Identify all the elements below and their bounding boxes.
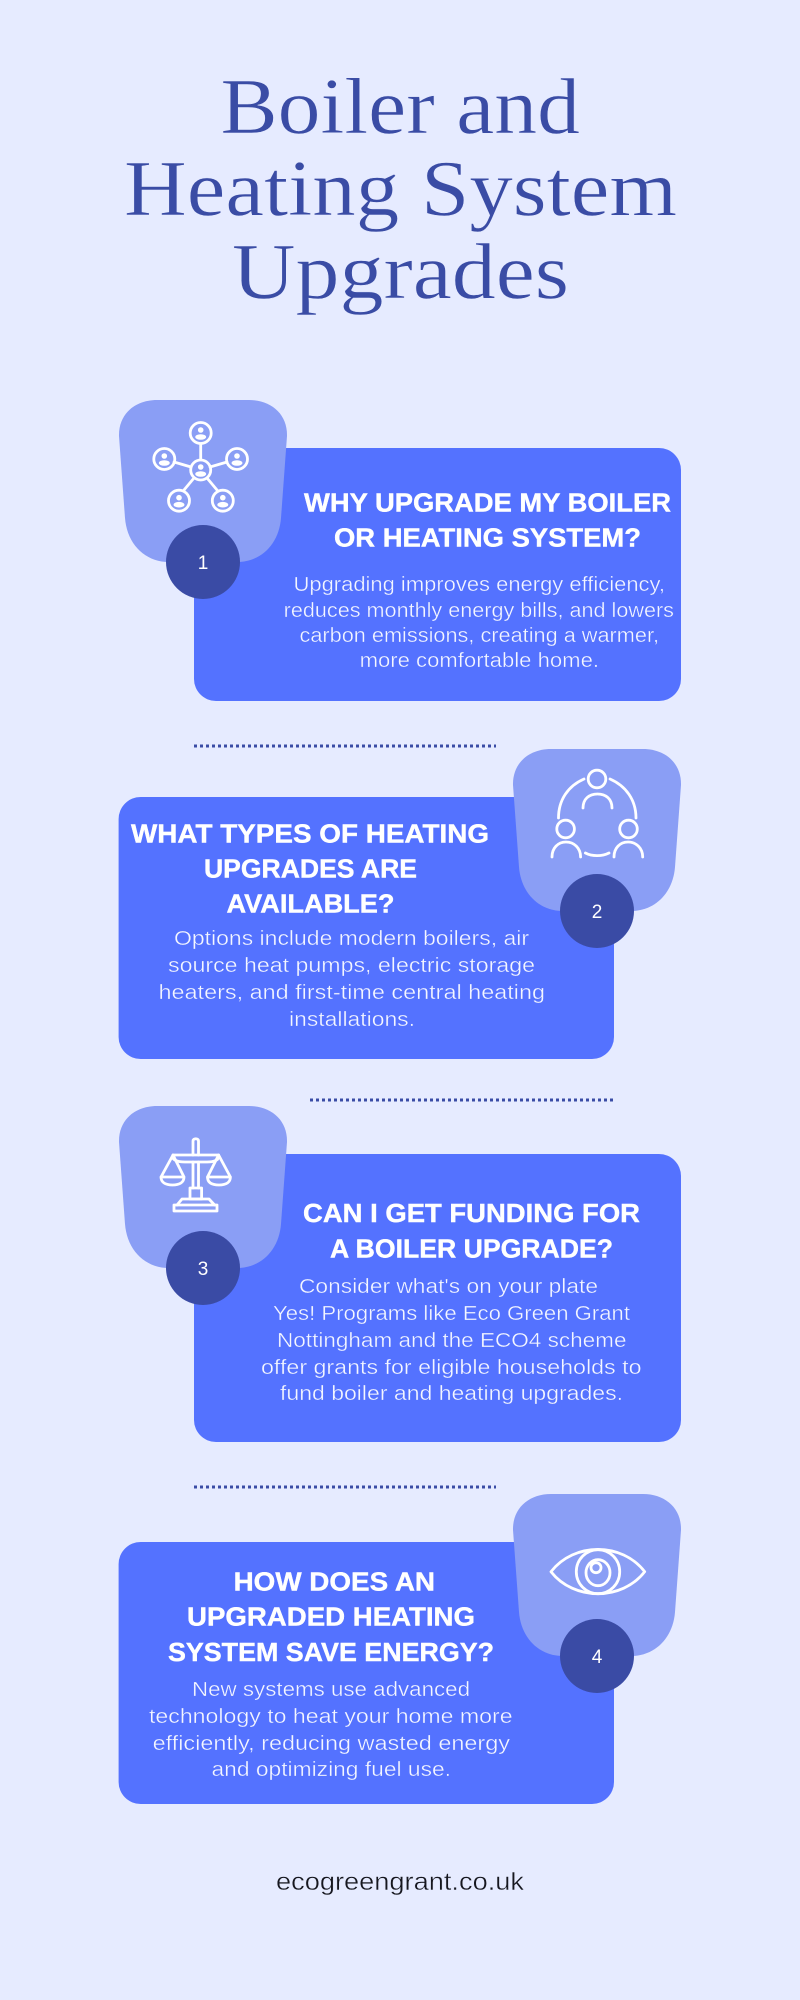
footer website: ecogreengrant.co.uk bbox=[276, 1868, 525, 1896]
panel: why upgrade bbox=[119, 400, 681, 701]
body text 3: Nottingham and the ECO4 scheme bbox=[277, 1330, 626, 1352]
body text 4: technology to heat your home more bbox=[149, 1706, 513, 1728]
body text 3: Consider what's on your plate bbox=[299, 1276, 598, 1298]
title bbox=[124, 64, 677, 316]
body text 1: Upgrading improves energy efficiency, bbox=[294, 574, 665, 596]
card background 3 bbox=[194, 1154, 681, 1442]
card background 1 bbox=[194, 448, 681, 701]
body text 3: fund boiler and heating upgrades. bbox=[280, 1383, 623, 1405]
icon: circle of people bbox=[552, 770, 643, 857]
title: Boiler and bbox=[220, 64, 580, 151]
heading 4: HOW DOES AN bbox=[234, 1569, 435, 1597]
icon: balance scales bbox=[161, 1139, 230, 1211]
number badge 3: 3 bbox=[198, 1259, 208, 1280]
body text 3: Yes! Programs like Eco Green Grant bbox=[273, 1303, 630, 1325]
heading 3 bbox=[303, 1200, 640, 1264]
heading 3: A BOILER UPGRADE? bbox=[330, 1236, 613, 1264]
body text 4: New systems use advanced bbox=[192, 1679, 470, 1701]
body text 2: installations. bbox=[289, 1009, 415, 1031]
icon badge 2 bbox=[513, 749, 681, 911]
number badge 4: 4 bbox=[592, 1647, 603, 1668]
heading 2: AVAILABLE? bbox=[226, 891, 394, 919]
icon: eye bbox=[551, 1549, 645, 1594]
card background 4 bbox=[119, 1542, 614, 1804]
heading 1 bbox=[304, 490, 671, 552]
card background 2 bbox=[119, 797, 614, 1059]
number badge 4 bbox=[560, 1619, 634, 1693]
icon badge 4 bbox=[513, 1494, 681, 1656]
icon badge 3 bbox=[119, 1106, 287, 1268]
title: Upgrades bbox=[232, 229, 569, 316]
number badge 2 bbox=[560, 874, 634, 948]
title: Heating System bbox=[124, 146, 677, 233]
heading 1: OR HEATING SYSTEM? bbox=[334, 524, 641, 552]
body text 1: more comfortable home. bbox=[360, 650, 599, 672]
heading 1: WHY UPGRADE MY BOILER bbox=[304, 490, 671, 518]
body text 2: heaters, and first-time central heating bbox=[158, 982, 545, 1004]
body text 1: carbon emissions, creating a warmer, bbox=[300, 625, 659, 647]
icon badge 1 bbox=[119, 400, 287, 562]
body text 2 bbox=[158, 928, 545, 1031]
body text 3 bbox=[261, 1276, 642, 1405]
heading 2: WHAT TYPES OF HEATING bbox=[131, 821, 489, 849]
number badge 1: 1 bbox=[198, 553, 208, 574]
body text 1: reduces monthly energy bills, and lowers bbox=[284, 600, 674, 622]
heading 2: UPGRADES ARE bbox=[204, 855, 417, 883]
number badge 3 bbox=[166, 1231, 240, 1305]
body text 4: and optimizing fuel use. bbox=[212, 1759, 451, 1781]
icon: people network bbox=[154, 422, 248, 511]
heading 3: CAN I GET FUNDING FOR bbox=[303, 1200, 640, 1228]
heading 4 bbox=[168, 1569, 494, 1667]
number badge 2: 2 bbox=[592, 902, 602, 923]
body text 2: source heat pumps, electric storage bbox=[168, 955, 535, 977]
heading 4: UPGRADED HEATING bbox=[187, 1604, 475, 1632]
body text 3: offer grants for eligible households to bbox=[261, 1357, 642, 1379]
body text 4: efficiently, reducing wasted energy bbox=[153, 1733, 510, 1755]
panel: saving energy bbox=[119, 1494, 681, 1804]
body text 4 bbox=[149, 1679, 513, 1781]
body text 2: Options include modern boilers, air bbox=[174, 928, 529, 950]
heading 2 bbox=[131, 821, 489, 919]
body text 1 bbox=[284, 574, 674, 672]
number badge 1 bbox=[166, 525, 240, 599]
panel: funding bbox=[119, 1106, 681, 1442]
panel: types of upgrades bbox=[119, 749, 681, 1059]
heading 4: SYSTEM SAVE ENERGY? bbox=[168, 1639, 494, 1667]
